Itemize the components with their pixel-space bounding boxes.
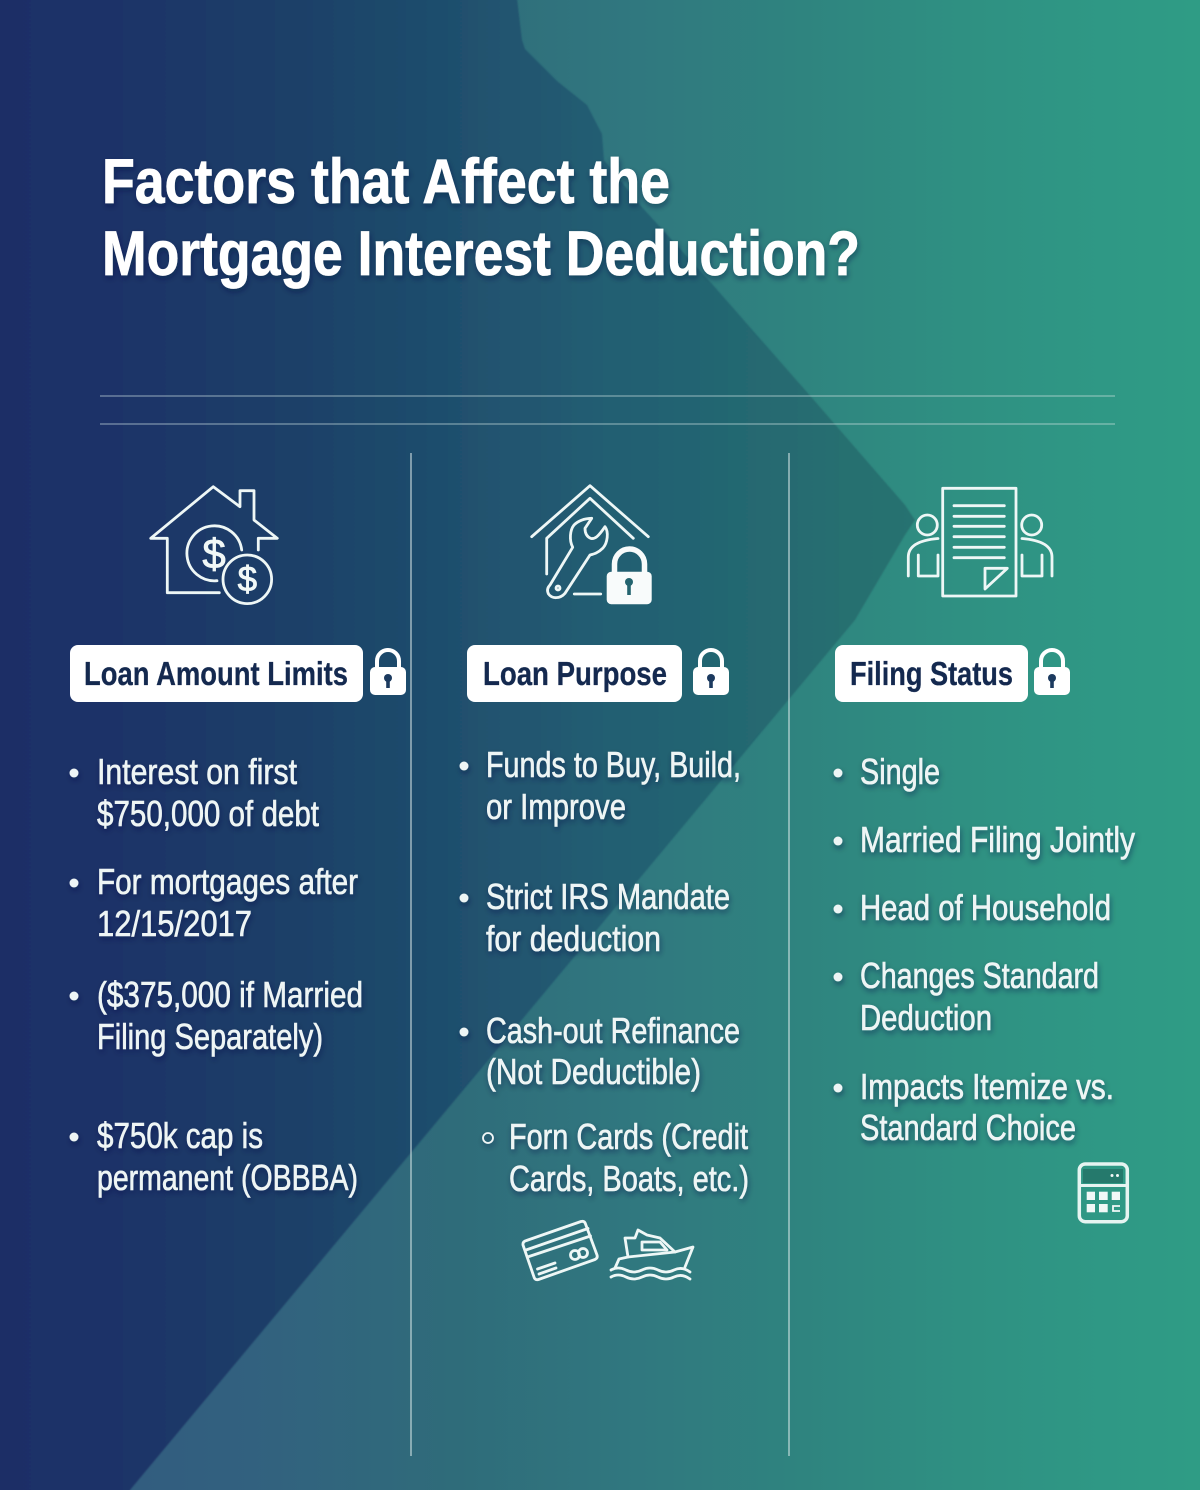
list: loan purpose bullets: Cards, Boats, etc.): [509, 1158, 749, 1199]
icon: padlock: [693, 650, 729, 695]
list: loan amount bullets: permanent (OBBBA): [97, 1157, 358, 1198]
list: loan amount bullets: For mortgages after: [97, 861, 358, 902]
list: loan purpose bullets: Funds to Buy, Build,: [486, 744, 741, 785]
list: filing status bullets: [834, 751, 1135, 1148]
title: [102, 147, 860, 289]
list: loan purpose bullets: for deduction: [486, 918, 661, 959]
list: filing status bullets: Changes Standard: [860, 955, 1099, 996]
list: loan amount bullets: Filing Separately): [97, 1016, 323, 1057]
list: loan amount bullets: [70, 751, 363, 1198]
list: loan amount bullets: Interest on first: [97, 751, 297, 792]
icon: boat: [611, 1230, 693, 1279]
label: filing status: [835, 645, 1028, 702]
list: filing status bullets: Married Filing Jointly: [860, 819, 1135, 860]
icon: calculator: [1079, 1164, 1127, 1222]
icon: credit card: [523, 1221, 597, 1280]
panel: loan amount limits: [70, 487, 406, 1198]
list: loan purpose bullets: Strict IRS Mandate: [486, 876, 730, 917]
list: filing status bullets: Standard Choice: [860, 1107, 1076, 1148]
list: loan amount bullets: ($375,000 if Married: [97, 974, 363, 1015]
list: loan purpose bullets: Forn Cards (Credit: [509, 1116, 748, 1157]
label: loan amount limits: [70, 645, 363, 702]
header rules: [100, 396, 1115, 424]
icon: house with dollar coins: $: [202, 530, 226, 577]
label: loan purpose: Loan Purpose: [483, 655, 667, 692]
list: loan amount bullets: 12/15/2017: [97, 903, 252, 944]
list: filing status bullets: Head of Household: [860, 887, 1111, 928]
list: loan amount bullets: $750,000 of debt: [97, 793, 319, 834]
title: Mortgage Interest Deduction?: [102, 219, 860, 289]
list: filing status bullets: Impacts Itemize vs.: [860, 1066, 1114, 1107]
list: loan purpose bullets: (Not Deductible): [486, 1051, 701, 1092]
icon: house with dollar coins: $: [238, 560, 257, 599]
label: loan purpose: [467, 645, 682, 702]
list: filing status bullets: Deduction: [860, 997, 992, 1038]
icon: padlock: [370, 650, 406, 695]
icon: house with wrench and padlock: [532, 486, 652, 604]
icon: document with two people: [908, 488, 1052, 596]
panel: loan purpose: [460, 486, 749, 1280]
label: loan amount limits: Loan Amount Limits: [84, 655, 348, 692]
list: loan purpose bullets: Cash-out Refinance: [486, 1010, 740, 1051]
column dividers: [411, 453, 789, 1456]
icon: house with dollar coins: [151, 487, 277, 604]
list: loan purpose bullets: [460, 744, 749, 1199]
list: loan amount bullets: $750k cap is: [97, 1115, 263, 1156]
panel: filing status: [834, 488, 1135, 1222]
icon: padlock: [1034, 650, 1070, 695]
list: filing status bullets: Single: [860, 751, 940, 792]
title: Factors that Affect the: [102, 147, 670, 217]
list: loan purpose bullets: or Improve: [486, 786, 626, 827]
label: filing status: Filing Status: [850, 655, 1013, 692]
